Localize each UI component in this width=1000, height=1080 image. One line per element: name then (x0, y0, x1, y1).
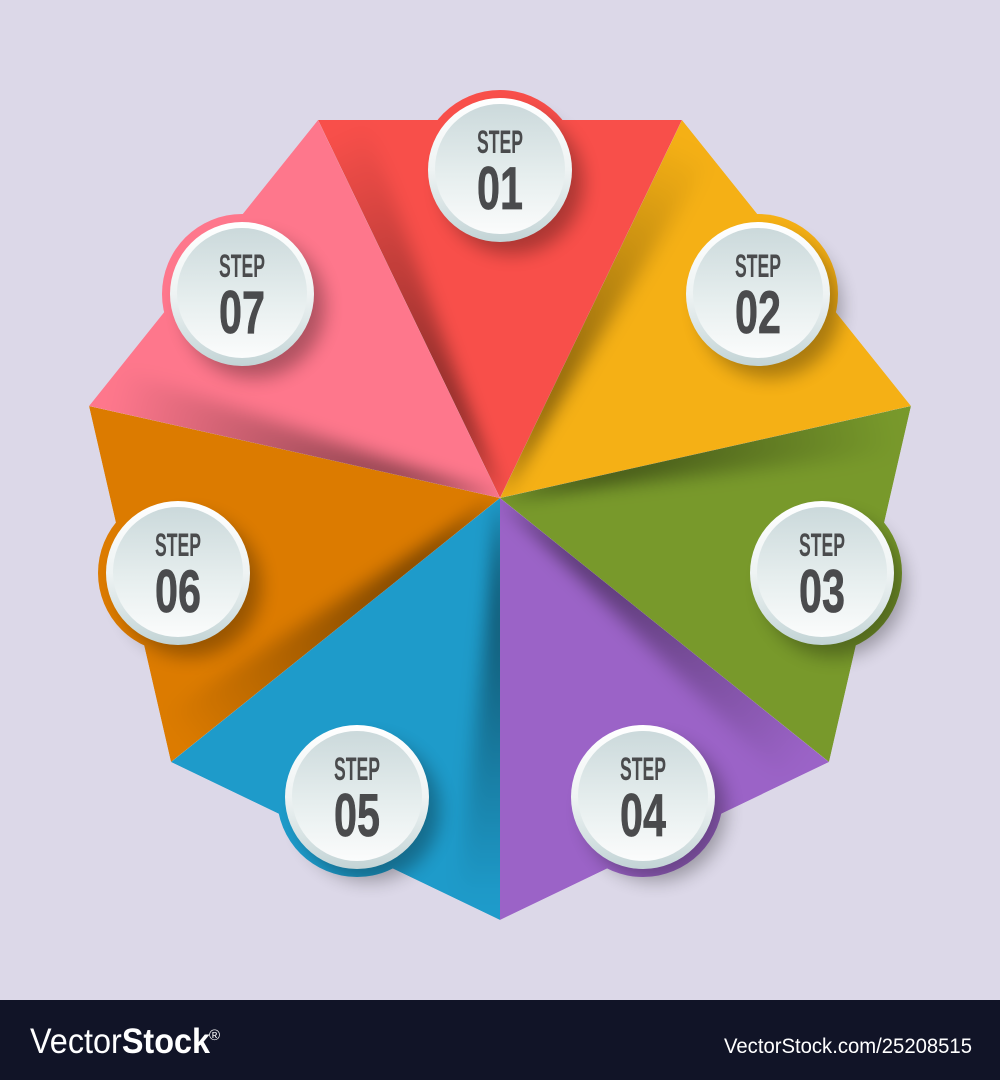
step 02 button (686, 222, 841, 378)
step 03 button: 03 (799, 558, 845, 625)
step 06 button (106, 501, 261, 657)
step 04 button: STEP (620, 751, 666, 787)
step 05 button: 05 (334, 782, 380, 849)
step 07 button (170, 222, 325, 378)
colored rings behind step buttons (98, 90, 902, 877)
step 02 button: 02 (735, 279, 781, 346)
step 02 button: STEP (735, 248, 781, 284)
wedge 02: yellow (500, 103, 911, 498)
step 07 button: 07 (219, 279, 265, 346)
step 05 button (285, 725, 440, 881)
step 03 button (750, 501, 905, 657)
step 03 button: STEP (799, 527, 845, 563)
wedge 07: pink (80, 120, 500, 498)
wedge 04: purple (500, 498, 854, 920)
step 05 button: STEP (334, 751, 380, 787)
wedge 05: blue (171, 498, 500, 920)
wedge 06: orange (89, 406, 500, 793)
footer image id: VectorStock.com/25208515 (724, 1035, 972, 1058)
step 06 button: STEP (155, 527, 201, 563)
footer bar (0, 1000, 1000, 1080)
step 01 button: 01 (477, 155, 523, 222)
step 04 button: 04 (620, 782, 666, 849)
step 01 button (428, 98, 583, 254)
wedge 03: green (500, 406, 911, 762)
step 07 button: STEP (219, 248, 265, 284)
step 04 button (571, 725, 726, 881)
footer logo: VectorStock (30, 1022, 210, 1061)
wedge 01: red (318, 120, 682, 498)
registered mark: ® (209, 1027, 220, 1044)
step 01 button: STEP (477, 124, 523, 160)
step 06 button: 06 (155, 558, 201, 625)
